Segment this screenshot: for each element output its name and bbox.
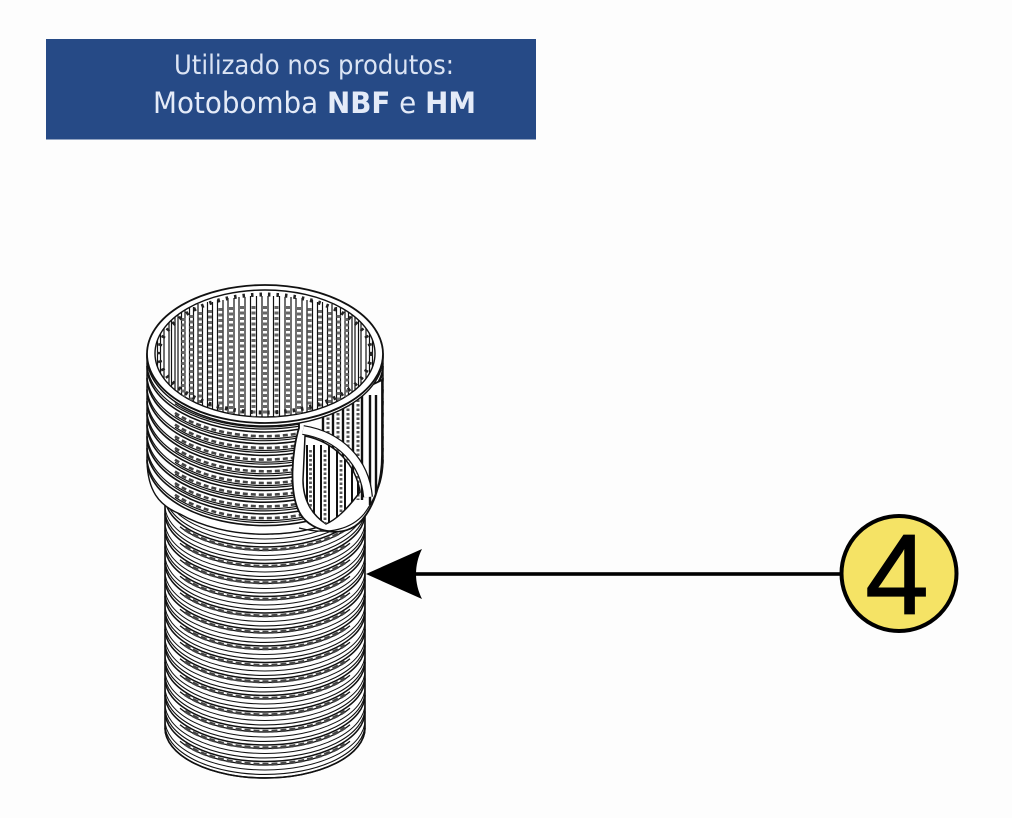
interior ribs [158, 294, 372, 420]
banner line 2: Motobomba NBF e HM [153, 86, 476, 120]
banner: product usage [46, 39, 536, 140]
side window [292, 380, 383, 532]
arrow pointing at the strainer [366, 549, 845, 599]
top rim and interior [147, 285, 383, 426]
lower cylinder body [165, 470, 365, 778]
callout badge number 4 [842, 512, 956, 639]
upper cylinder body [147, 354, 383, 534]
strainer cylinder illustration [147, 285, 383, 778]
banner line 1: Utilizado nos produtos: [174, 50, 454, 81]
callout badge number 4: 4 [865, 512, 929, 639]
